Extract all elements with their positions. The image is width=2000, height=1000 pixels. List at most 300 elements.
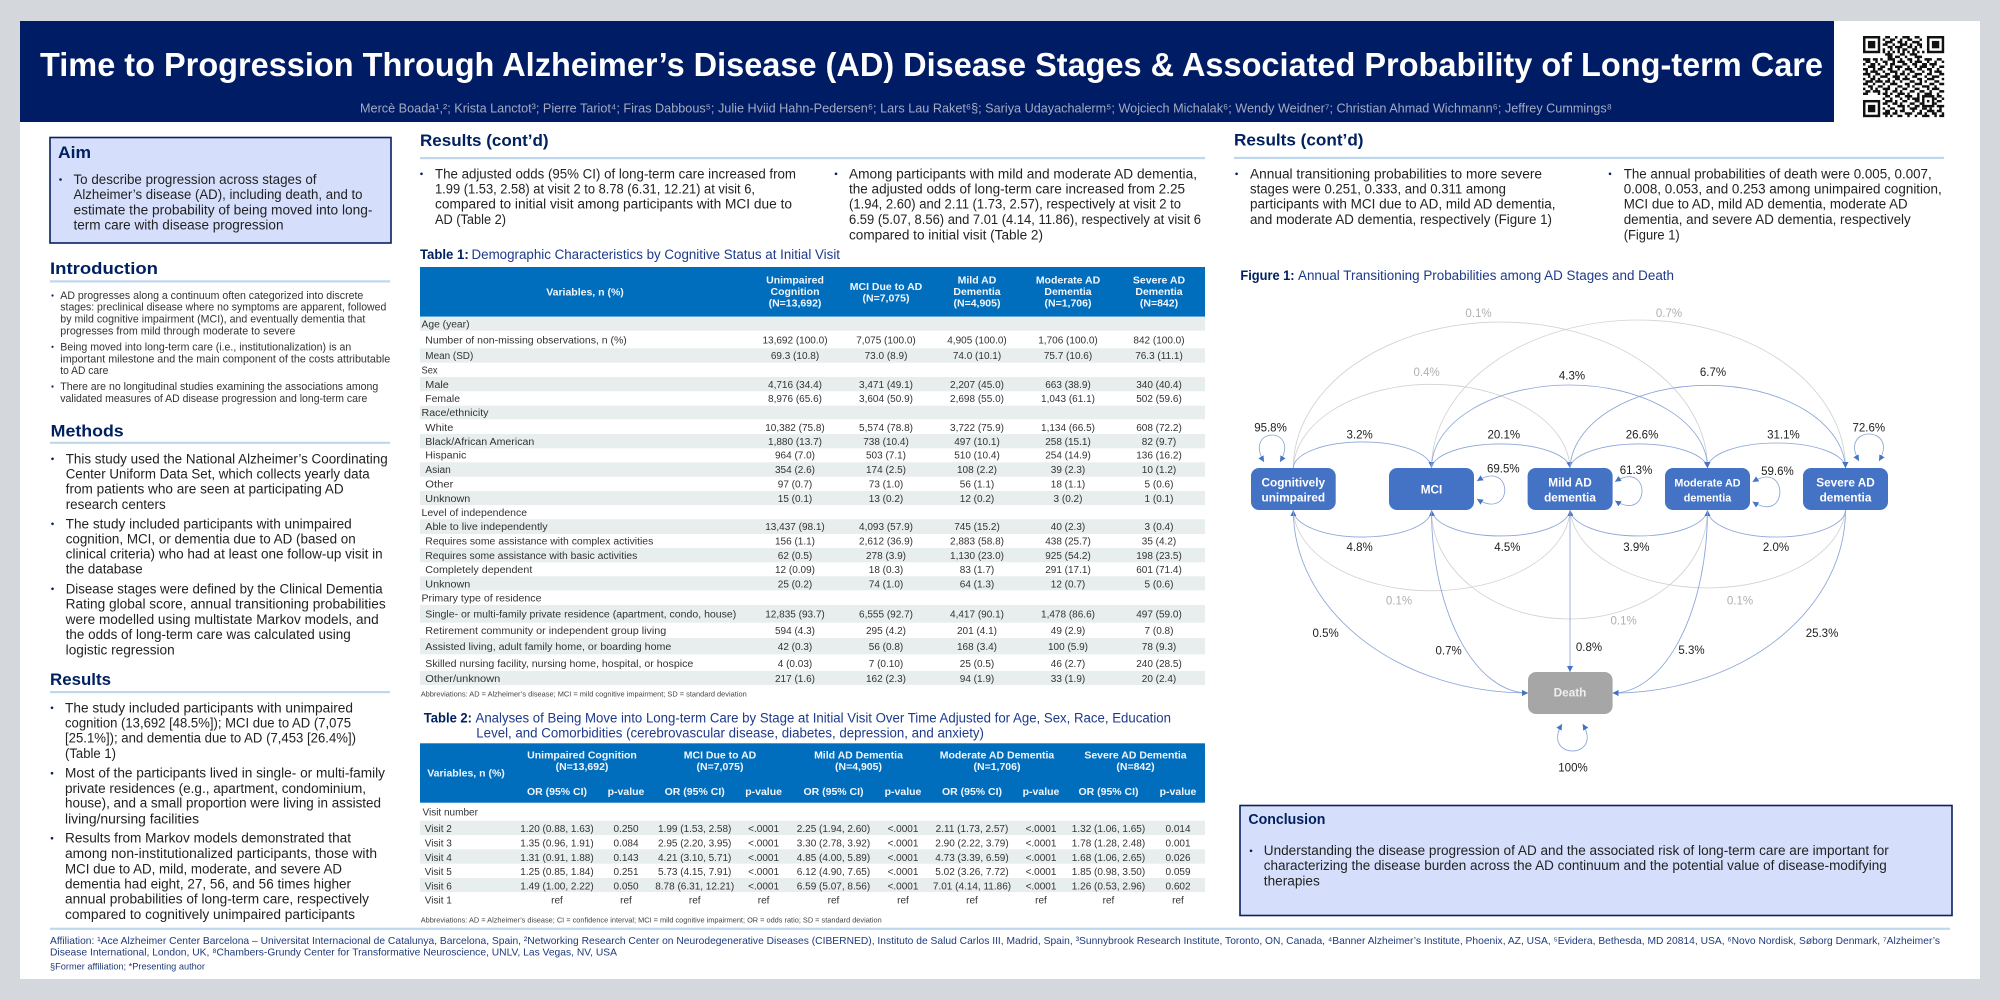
figure 1: state transition diagram xyxy=(1251,308,1888,774)
table 1 values: 7,075 (100.0) xyxy=(856,336,916,346)
table 1 values: 56 (0.8) xyxy=(869,642,903,653)
table 1 row labels: Retirement community or independent group living xyxy=(425,626,666,637)
results text: Results from Markov models demonstrated that xyxy=(65,831,351,846)
table 1 values: 15 (0.1) xyxy=(778,494,812,505)
arrows: backward transitions xyxy=(1293,510,1846,537)
table 2 header: (N=4,905) xyxy=(835,761,882,773)
table 2 values: 0.001 xyxy=(1165,838,1191,850)
table 1 row labels: Black/African American xyxy=(425,437,534,448)
methods text xyxy=(51,451,388,657)
table 2 header: (N=13,692) xyxy=(556,761,608,773)
probability labels: 3.2% xyxy=(1346,430,1373,442)
table 1 header: Variables, n (%) xyxy=(546,287,624,299)
heading: results: Results xyxy=(50,670,111,689)
table 2 values: <.0001 xyxy=(748,867,779,878)
table 1 values: 4,417 (90.1) xyxy=(950,610,1004,620)
table 1 values: 4,716 (34.4) xyxy=(768,380,822,391)
results text: (Table 1) xyxy=(65,746,116,761)
table 2 values: ref xyxy=(551,896,563,906)
table 2 values xyxy=(520,824,1191,906)
authors: Mercè Boada¹,²; Krista Lanctot³; Pierre Tariot⁴; Firas Dabbous⁵; Julie Hviid Hahn-Pedersen⁶; Lars Lau Raket⁶§; Sariya Udayachalerm⁵; Wojciech Michalak⁶; Wendy Weidner⁷; Christian Ahmad Wichmann⁶; Jeffrey Cummings⁸ xyxy=(360,102,1612,116)
table 1 values: 1 (0.1) xyxy=(1145,494,1173,505)
table 1 values: 2,883 (58.8) xyxy=(950,536,1004,548)
table 1 values: 608 (72.2) xyxy=(1136,423,1182,434)
table 1 values: 1,134 (66.5) xyxy=(1041,423,1095,434)
panel: methods xyxy=(50,422,390,657)
table 1 values: 5 (0.6) xyxy=(1145,480,1173,490)
probability labels: 0.1% xyxy=(1465,308,1492,320)
table 1 values: 340 (40.4) xyxy=(1136,380,1182,391)
table 1 values: 12 (0.7) xyxy=(1051,580,1085,590)
probability labels: 72.6% xyxy=(1852,422,1885,434)
table 1 values: 3,471 (49.1) xyxy=(859,380,913,391)
table 1 row labels: Female xyxy=(425,394,460,405)
table 1 values: 78 (9.3) xyxy=(1142,642,1176,653)
table 1 values: 354 (2.6) xyxy=(775,465,815,476)
table 1 row labels: Age (year) xyxy=(422,320,470,330)
introduction text: progresses from mild through moderate to severe xyxy=(60,326,295,338)
table 1 values: 10 (1.2) xyxy=(1142,465,1176,476)
table 2 values: <.0001 xyxy=(748,853,779,864)
table 1 values: 217 (1.6) xyxy=(775,674,815,685)
table 1 values: 94 (1.9) xyxy=(960,674,994,685)
probability labels: 4.5% xyxy=(1494,542,1521,554)
table 2 values: ref xyxy=(897,896,909,906)
table 1 values: 1,043 (61.1) xyxy=(1041,394,1095,405)
table 2 header: Unimpaired Cognition xyxy=(527,749,637,761)
table 2 header: p-value xyxy=(1023,786,1060,798)
table 1 values: 2,207 (45.0) xyxy=(950,380,1004,391)
table 1 values: 601 (71.4) xyxy=(1136,565,1182,576)
panel: results continued, middle column xyxy=(420,131,1205,242)
table 1 row labels: Sex xyxy=(422,366,438,376)
node: moderate AD dementia: Moderate AD xyxy=(1674,478,1741,490)
figure 1 title: Figure 1: xyxy=(1240,268,1295,283)
bullet: mild and moderate odds xyxy=(835,166,1201,242)
table 1 values: 1,880 (13.7) xyxy=(768,437,822,448)
footer: affiliations: §Former affiliation; *Presenting author xyxy=(50,961,205,971)
table 1 values: 201 (4.1) xyxy=(957,626,997,637)
probability labels: 26.6% xyxy=(1626,430,1658,442)
table 1 values xyxy=(762,336,1185,685)
table 1 values: 842 (100.0) xyxy=(1133,336,1185,346)
table 2 values: 0.026 xyxy=(1165,853,1191,864)
table 2 header: (N=7,075) xyxy=(697,761,743,773)
table 1 values: 254 (14.9) xyxy=(1045,450,1091,462)
bullet: transitioning probabilities: and moderate AD dementia, respectively (Figure 1) xyxy=(1250,212,1552,227)
table 2 values: <.0001 xyxy=(748,882,779,892)
table 2 values: 1.68 (1.06, 2.65) xyxy=(1072,853,1145,864)
table 1 values: 168 (3.4) xyxy=(957,642,997,653)
table 2 values: 3.30 (2.78, 3.92) xyxy=(797,838,870,850)
results text: living/nursing facilities xyxy=(65,811,199,826)
table 1 row labels: Race/ethnicity xyxy=(422,408,488,419)
table 2 values: 2.25 (1.94, 2.60) xyxy=(797,824,870,835)
table 1 values: 503 (7.1) xyxy=(866,450,906,462)
table 2 values: ref xyxy=(689,896,701,906)
table 1 values: 663 (38.9) xyxy=(1045,380,1091,391)
probability labels: 0.7% xyxy=(1435,645,1462,657)
table 1 values: 162 (2.3) xyxy=(866,674,906,685)
heading: methods: Methods xyxy=(51,422,124,441)
results text: [25.1%]); and dementia due to AD (7,453 [26.4%]) xyxy=(65,731,356,746)
aim text: estimate the probability of being moved into long- xyxy=(74,202,372,217)
node: mild AD dementia: Mild AD xyxy=(1548,476,1592,490)
table 2 header: p-value xyxy=(608,786,645,798)
table 1 values: 240 (28.5) xyxy=(1136,659,1182,670)
table 1 row labels: Assisted living, adult family home, or boarding home xyxy=(425,642,672,653)
table 1 values: 64 (1.3) xyxy=(960,580,994,590)
table 1 values: 258 (15.1) xyxy=(1045,437,1091,448)
footer: affiliations xyxy=(50,928,1950,971)
footer: affiliations: Disease International, London, UK, ⁸Chambers-Grundy Center for Transformative Neuroscience, UNLV, Las Vegas, NV, USA xyxy=(50,947,617,959)
introduction text: validated measures of AD disease progression and long-term care xyxy=(60,393,367,405)
table 2 values: 5.73 (4.15, 7.91) xyxy=(658,867,731,878)
table 1 values: 100 (5.9) xyxy=(1048,642,1088,653)
table 1 values: 1,130 (23.0) xyxy=(950,551,1004,562)
table 1 row labels: Skilled nursing facility, nursing home, hospital, or hospice xyxy=(425,659,694,670)
table 1 row labels: Hispanic xyxy=(425,450,466,462)
table 1 row labels: Requires some assistance with basic activities xyxy=(425,551,637,562)
bullet: transitioning probabilities: participants with MCI due to AD, mild AD dementia, xyxy=(1250,197,1556,212)
table 1 row labels: Able to live independently xyxy=(425,522,548,533)
figure 1 title: Annual Transitioning Probabilities among AD Stages and Death xyxy=(1298,268,1674,283)
probability labels: 0.1% xyxy=(1610,615,1637,627)
table 1 row labels: White xyxy=(425,423,454,434)
probability labels: 20.1% xyxy=(1487,430,1520,442)
table 1 header: Dementia xyxy=(1044,286,1092,298)
node: death xyxy=(1528,672,1613,714)
table 1 values: 497 (10.1) xyxy=(954,437,1000,448)
table 2 row labels: Visit 6 xyxy=(425,882,452,892)
table 1 values: 8,976 (65.6) xyxy=(768,394,822,405)
conclusion text: characterizing the disease burden across the AD continuum and the potential value of disease-modifying xyxy=(1264,858,1887,873)
table 1 abbreviations: Abbreviations: AD = Alzheimer’s disease; MCI = mild cognitive impairment; SD = standard deviation xyxy=(421,690,747,699)
table 2 values: <.0001 xyxy=(888,867,919,878)
table 2 row labels: Visit 4 xyxy=(425,853,452,864)
table 1 values: 75.7 (10.6) xyxy=(1044,351,1092,362)
conclusion text xyxy=(1250,843,1889,888)
table 2 values: ref xyxy=(1035,896,1047,906)
probability labels: 95.8% xyxy=(1254,422,1287,434)
table 1 values: 4,905 (100.0) xyxy=(947,336,1007,346)
bullet: MCI odds: AD (Table 2) xyxy=(435,212,506,227)
table 2 header: MCI Due to AD xyxy=(684,749,757,761)
table 2 values: ref xyxy=(966,896,978,906)
table 1 values: 198 (23.5) xyxy=(1136,551,1182,562)
arrows: forward transitions xyxy=(1293,385,1846,468)
table 1 values: 7 (0.8) xyxy=(1145,626,1173,637)
table 2 header: p-value xyxy=(745,786,782,798)
heading: results cont'd right: Results (cont’d) xyxy=(1234,130,1364,150)
heading: results cont'd: Results (cont’d) xyxy=(420,131,549,150)
table 1 values: 4,093 (57.9) xyxy=(859,522,913,533)
table 2: odds of long-term care xyxy=(420,743,1205,925)
table 1 values: 76.3 (11.1) xyxy=(1135,351,1183,362)
methods text: cognition, MCI, or dementia due to AD (based on xyxy=(66,532,356,547)
table 1 values: 33 (1.9) xyxy=(1051,674,1085,685)
methods text: The study included participants with unimpaired xyxy=(66,516,352,531)
table 2 values: 1.25 (0.85, 1.84) xyxy=(520,867,594,878)
table 1 row labels: Other/unknown xyxy=(425,674,500,685)
table 1 values: 136 (16.2) xyxy=(1136,450,1182,462)
table 2 values: 1.20 (0.88, 1.63) xyxy=(520,824,594,835)
table 2 values: 1.32 (1.06, 1.65) xyxy=(1072,824,1145,835)
table 1 values: 69.3 (10.8) xyxy=(771,351,819,362)
probability labels: 2.0% xyxy=(1763,542,1789,554)
table 1 header: MCI Due to AD xyxy=(850,281,923,293)
table 1 row labels: Unknown xyxy=(425,494,470,505)
table 1 values: 594 (4.3) xyxy=(775,626,815,637)
table 1 values: 20 (2.4) xyxy=(1142,674,1176,685)
table 2 values: 1.31 (0.91, 1.88) xyxy=(520,853,594,864)
node: mild AD dementia xyxy=(1528,468,1613,510)
panel: aim xyxy=(50,138,391,243)
table 1 header: Mild AD xyxy=(958,274,997,286)
table 1 values: 156 (1.1) xyxy=(775,536,815,548)
table 2 header: Variables, n (%) xyxy=(427,768,505,780)
results text: compared to cognitively unimpaired participants xyxy=(65,907,355,922)
table 2 header xyxy=(420,743,1205,803)
table 1 title: Demographic Characteristics by Cognitive Status at Initial Visit xyxy=(472,247,840,262)
table 1 header: Moderate AD xyxy=(1036,274,1101,286)
aim text: To describe progression across stages of xyxy=(74,172,317,187)
probability labels xyxy=(1254,308,1885,774)
table 1 header: Severe AD xyxy=(1133,274,1185,286)
table 1 values: 745 (15.2) xyxy=(954,522,1000,533)
table 1 header xyxy=(420,267,1205,317)
table 2 values: 1.78 (1.28, 2.48) xyxy=(1072,838,1145,850)
results text: MCI due to AD, mild, moderate, and severe AD xyxy=(65,861,342,876)
table 1 row labels: Male xyxy=(425,380,449,391)
table 2 values: 2.90 (2.22, 3.79) xyxy=(935,838,1009,850)
table 1 values: 3 (0.4) xyxy=(1145,522,1173,533)
panel: results xyxy=(50,670,390,922)
table 2 values: <.0001 xyxy=(748,824,779,835)
bullet: probabilities of death: MCI due to AD, mild AD dementia, moderate AD xyxy=(1624,197,1908,212)
bullet: mild and moderate odds: (1.94, 2.60) and 2.11 (1.73, 2.57), respectively at visit 2 to xyxy=(849,197,1181,212)
table 1 values: 13,437 (98.1) xyxy=(765,522,825,533)
results text: dementia had eight, 27, 56, and 56 times higher xyxy=(65,876,351,891)
table 1 values: 73.0 (8.9) xyxy=(865,351,907,362)
table 2 values: 1.99 (1.53, 2.58) xyxy=(658,824,731,835)
table 2 values: <.0001 xyxy=(748,838,779,850)
probability labels: 3.9% xyxy=(1623,542,1650,554)
table 2 row labels: Visit 2 xyxy=(425,824,452,835)
arrows: self loops xyxy=(1259,434,1883,751)
table 1 values: 497 (59.0) xyxy=(1136,610,1182,620)
node: death: Death xyxy=(1554,686,1586,700)
table 1 values: 6,555 (92.7) xyxy=(859,610,913,620)
table 1 values: 291 (17.1) xyxy=(1045,565,1091,576)
table 2 header: Mild AD Dementia xyxy=(814,749,903,761)
heading: introduction: Introduction xyxy=(50,259,158,278)
table 2 row labels: Visit number xyxy=(422,808,479,818)
bullet: probabilities of death: The annual probabilities of death were 0.005, 0.007, xyxy=(1624,166,1932,181)
node: severe AD dementia: Severe AD xyxy=(1816,476,1875,490)
table 1 values: 42 (0.3) xyxy=(778,642,812,653)
table 2 values: <.0001 xyxy=(1026,853,1057,864)
table 2 values: ref xyxy=(758,896,770,906)
table 1 row labels: Requires some assistance with complex activities xyxy=(425,536,653,548)
table 1 values: 2,698 (55.0) xyxy=(950,394,1004,405)
table 1 values: 56 (1.1) xyxy=(960,480,994,490)
table 1 header: (N=7,075) xyxy=(863,293,909,305)
table 1 values: 18 (0.3) xyxy=(869,565,903,576)
probability labels: 25.3% xyxy=(1806,628,1838,640)
table 2 values: 0.143 xyxy=(613,853,639,864)
table 1 values: 5,574 (78.8) xyxy=(859,423,913,434)
arrows: transitions to death xyxy=(1293,510,1846,693)
node: mild AD dementia: dementia xyxy=(1544,491,1596,505)
table 1 values: 18 (1.1) xyxy=(1051,480,1085,490)
table 2 header: OR (95% CI) xyxy=(1078,786,1139,798)
table 1 values: 13 (0.2) xyxy=(869,494,903,505)
results text: private residences (e.g., apartment, condominium, xyxy=(65,781,366,796)
methods text: from patients who are seen at participating AD xyxy=(66,481,344,496)
table 1 values: 108 (2.2) xyxy=(957,465,997,476)
table 2 values: <.0001 xyxy=(1026,867,1057,878)
table 2 header: OR (95% CI) xyxy=(803,786,864,798)
table 1 row labels: Level of independence xyxy=(422,508,528,519)
node: severe AD dementia: dementia xyxy=(1820,491,1872,505)
table 2 values: 1.35 (0.96, 1.91) xyxy=(520,838,594,850)
bullet: mild and moderate odds: Among participants with mild and moderate AD dementia, xyxy=(849,166,1197,181)
table 2 values: ref xyxy=(1103,896,1115,906)
table 2 values: 2.95 (2.20, 3.95) xyxy=(658,838,731,850)
probability labels: 0.8% xyxy=(1576,642,1602,654)
table 1 values: 10,382 (75.8) xyxy=(765,423,825,434)
panel: results continued, right column xyxy=(1234,130,1944,242)
table 1 values: 174 (2.5) xyxy=(866,465,906,476)
table 1 values: 7 (0.10) xyxy=(869,659,903,670)
table 2 row labels xyxy=(422,808,479,906)
introduction text: important milestone and the main component of the costs attributable xyxy=(60,353,390,365)
table 1 values: 73 (1.0) xyxy=(869,480,903,490)
table 2 title: Analyses of Being Move into Long-term Care by Stage at Initial Visit Over Time Adjusted for Age, Sex, Race, Education xyxy=(476,711,1171,726)
methods text: Center Uniform Data Set, which collects yearly data xyxy=(66,466,370,481)
table 1 title: Table 1: xyxy=(420,247,469,262)
table 2 header: Severe AD Dementia xyxy=(1084,749,1187,761)
table 1 row labels: Other xyxy=(425,480,454,490)
icon: QR code xyxy=(1863,37,1944,116)
table 1 row labels: Asian xyxy=(425,465,451,476)
table 1 row labels: Number of non-missing observations, n (%) xyxy=(425,336,627,346)
probability labels: 59.6% xyxy=(1761,466,1794,478)
panel: conclusion xyxy=(1240,806,1952,916)
table 2 values: 0.251 xyxy=(613,867,639,878)
bullet: probabilities of death xyxy=(1609,166,1942,242)
table 1 values: 13,692 (100.0) xyxy=(762,336,828,346)
table 2 header: OR (95% CI) xyxy=(665,786,725,798)
probability labels: 4.3% xyxy=(1559,370,1585,382)
bullet: transitioning probabilities: stages were 0.251, 0.333, and 0.311 among xyxy=(1250,181,1506,196)
arrows: rare transitions xyxy=(1293,320,1846,619)
conclusion text: therapies xyxy=(1264,873,1320,888)
table 1 header: Dementia xyxy=(1135,286,1183,298)
table 1 values: 40 (2.3) xyxy=(1051,522,1085,533)
probability labels: 0.5% xyxy=(1312,628,1339,640)
table 1 values: 62 (0.5) xyxy=(778,551,812,562)
results text: among non-institutionalized participants, those with xyxy=(65,846,377,861)
table 2 title xyxy=(424,711,1171,740)
table 1 row labels: Mean (SD) xyxy=(425,351,473,362)
bullet: mild and moderate odds: 6.59 (5.07, 8.56) and 7.01 (4.14, 11.86), respectively at visit 6 xyxy=(849,212,1201,227)
table 1 header: (N=1,706) xyxy=(1045,298,1091,310)
table 2 header: p-value xyxy=(885,786,922,798)
table 2 values: <.0001 xyxy=(888,838,919,850)
table 1 values: 925 (54.2) xyxy=(1045,551,1091,562)
table 2 title: Level, and Comorbidities (cerebrovascular disease, diabetes, depression, and anxiety) xyxy=(476,725,984,740)
aim text: term care with disease progression xyxy=(74,217,284,232)
table 1 values: 2,612 (36.9) xyxy=(859,536,913,548)
table 2 header: (N=842) xyxy=(1116,761,1155,773)
node: cognitively unimpaired xyxy=(1251,468,1336,510)
probability labels: 0.1% xyxy=(1727,595,1753,607)
table 2 values: 8.78 (6.31, 12.21) xyxy=(655,882,734,892)
table 2 values: <.0001 xyxy=(1026,824,1057,835)
bullet: probabilities of death: (Figure 1) xyxy=(1624,227,1680,242)
results text: Most of the participants lived in single- or multi-family xyxy=(65,766,385,781)
table 1 values: 964 (7.0) xyxy=(775,450,815,462)
node: MCI: MCI xyxy=(1421,482,1442,496)
table 1 values: 46 (2.7) xyxy=(1051,659,1085,670)
probability labels: 6.7% xyxy=(1700,367,1726,379)
table 1 values: 49 (2.9) xyxy=(1051,626,1085,637)
table 1 values: 278 (3.9) xyxy=(866,551,906,562)
probability labels: 61.3% xyxy=(1620,465,1652,477)
table 1 header: (N=13,692) xyxy=(769,298,821,310)
node: cognitively unimpaired: Cognitively xyxy=(1262,476,1326,490)
table 1 values: 74 (1.0) xyxy=(869,580,903,590)
methods text: research centers xyxy=(66,497,166,512)
table 2 values: <.0001 xyxy=(888,824,919,835)
footer: affiliations: Affiliation: ¹Ace Alzheimer Center Barcelona – Universitat Internacional de Catalunya, Barcelona, Spain, ²Networking Research Center on Neurodegenerative Diseases (CIBERNED), Instituto de Salud Carlos III, Madrid, Spain, ³Sunnybrook Research Institute, Toronto, ON, Canada, ⁴Banner Alzheimer’s Institute, Phoenix, AZ, USA, ⁵Evidera, Bethesda, MD 20814, USA, ⁶Novo Nordisk, Søborg Denmark, ⁷Alzheimer’s xyxy=(50,935,1940,947)
introduction text xyxy=(51,290,390,405)
table 2 values: 0.250 xyxy=(613,824,639,835)
table 1 row labels: Completely dependent xyxy=(425,565,533,576)
table 1 values: 4 (0.03) xyxy=(778,659,812,670)
table 1 header: Dementia xyxy=(953,286,1001,298)
table 2 header: OR (95% CI) xyxy=(527,786,587,798)
table 1 values: 83 (1.7) xyxy=(960,565,994,576)
probability labels: 0.7% xyxy=(1656,308,1682,320)
probability labels: 69.5% xyxy=(1487,464,1520,476)
table 1 values: 5 (0.6) xyxy=(1145,580,1173,590)
table 1 values: 3 (0.2) xyxy=(1054,494,1082,505)
table 2 values: <.0001 xyxy=(1026,838,1057,850)
bullet: transitioning probabilities: Annual transitioning probabilities to more severe xyxy=(1250,166,1542,181)
table 1 row labels: Unknown xyxy=(425,580,470,590)
table 2 values: 1.26 (0.53, 2.96) xyxy=(1072,882,1145,892)
table 1 values: 39 (2.3) xyxy=(1051,465,1085,476)
methods text: logistic regression xyxy=(66,642,175,657)
table 2 row labels: Visit 1 xyxy=(425,896,452,906)
node: MCI xyxy=(1389,468,1474,510)
table 1 header: Cognition xyxy=(771,286,819,298)
bullet: MCI odds: 1.99 (1.53, 2.58) at visit 2 to 8.78 (6.31, 12.21) at visit 6, xyxy=(435,181,755,196)
introduction text: Being moved into long-term care (i.e., institutionalization) is an xyxy=(60,341,351,353)
bullet: MCI odds: compared to initial visit among participants with MCI due to xyxy=(435,197,792,212)
table 1 values: 1,478 (86.6) xyxy=(1041,610,1095,620)
methods text: the odds of long-term care was calculated using xyxy=(66,627,351,642)
table 2 values: 0.602 xyxy=(1165,882,1191,892)
bullet: MCI odds: The adjusted odds (95% CI) of long-term care increased from xyxy=(435,166,796,181)
table 2 values: ref xyxy=(1172,896,1184,906)
node: cognitively unimpaired: unimpaired xyxy=(1262,491,1325,505)
table 1 values: 438 (25.7) xyxy=(1045,536,1091,548)
probability labels: 0.4% xyxy=(1413,367,1440,379)
